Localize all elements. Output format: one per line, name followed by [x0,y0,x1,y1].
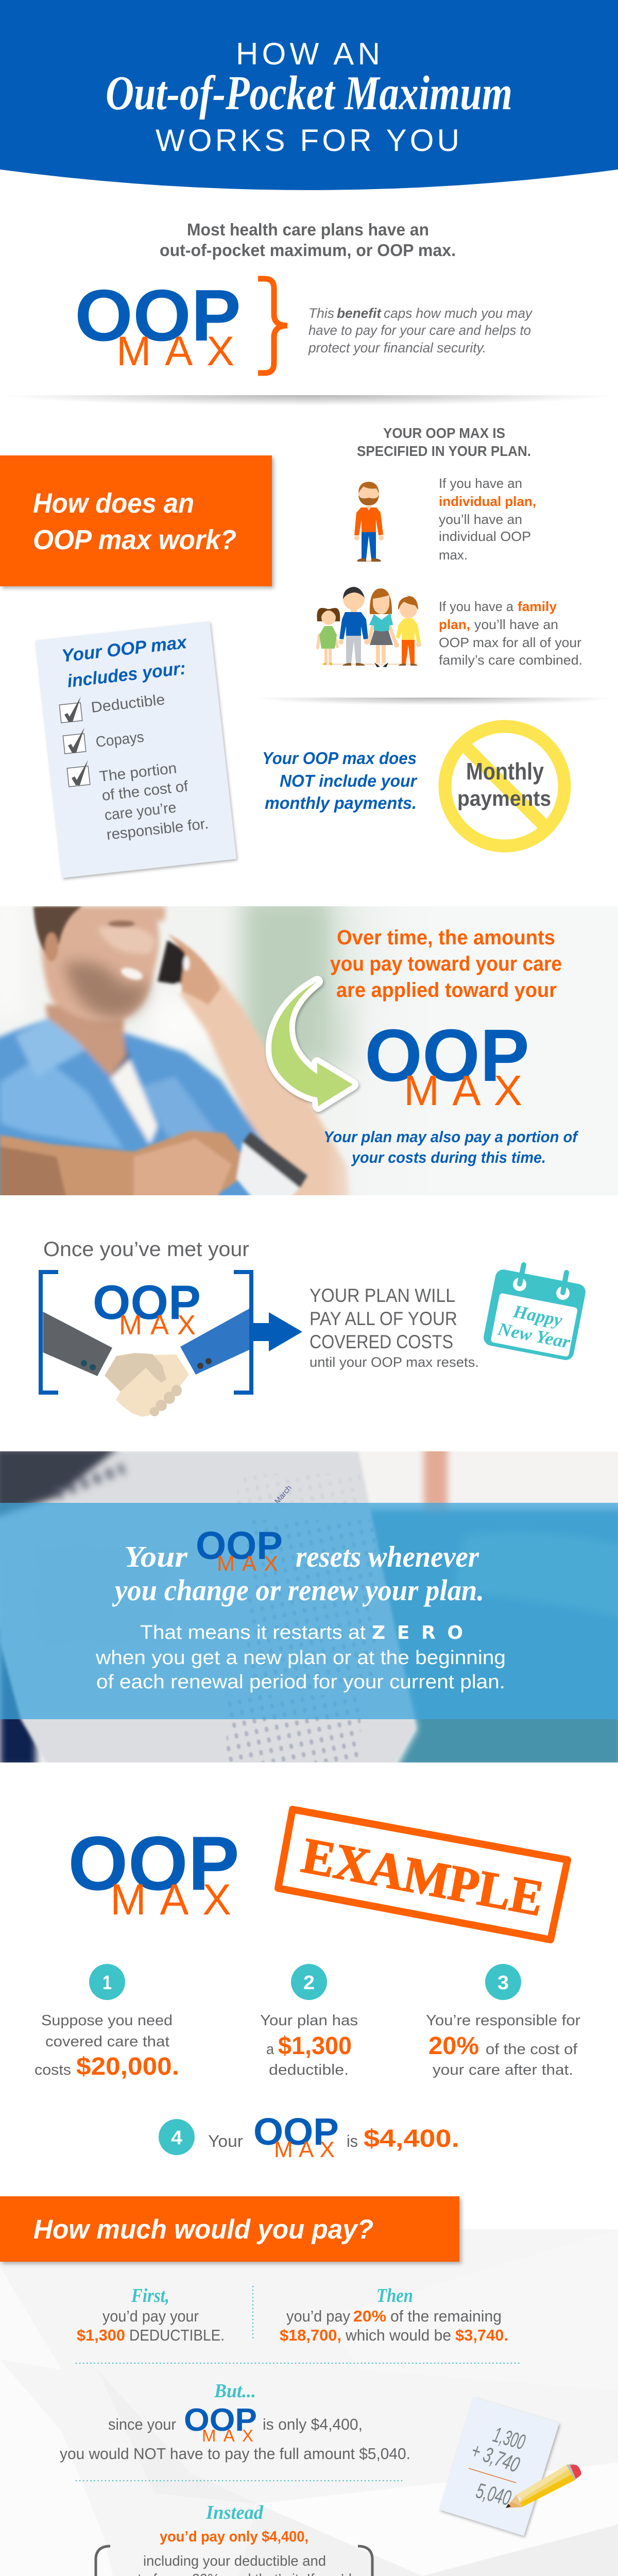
instead text: you’d pay only $4,400, [160,2529,308,2545]
example stamp [278,1809,568,1940]
step 1: Suppose you need [41,2012,173,2029]
family plan text: family’s care combined. [439,652,582,668]
plan pays portion text [323,1128,579,1166]
OOP max logo: OOP [253,2110,339,2153]
step 2: deductible. [269,2062,349,2078]
OOP max logo: MAX [116,328,234,375]
plan pays all text: until your OOP max resets. [310,1354,479,1370]
step 3: You’re responsible for [426,2012,580,2029]
step 3 [426,1964,580,2078]
step 2 [260,1964,358,2078]
then step text: you’d pay [286,2307,350,2325]
then step text: Then [376,2285,413,2307]
intro text: out-of-pocket maximum, or OOP max. [160,241,456,260]
checklist label: care you’re [104,800,177,824]
individual plan text [439,476,536,563]
checklist label [98,760,210,843]
intro text: Most health care plans have an [187,220,429,239]
divider shadow [252,698,618,713]
step 3: your care after that. [433,2062,573,2078]
first step text: you’d pay your [102,2307,199,2325]
then step text: $3,740. [455,2326,508,2344]
raised arm [178,970,351,1195]
left brace [84,2546,110,2576]
OOP max logo: OOP [365,1014,529,1097]
benefit description: protect your financial security. [308,340,486,355]
example stamp: EXAMPLE [298,1827,548,1927]
header banner [0,0,618,190]
stubble [64,962,149,1018]
family plan text [439,599,582,668]
reset text: That means it restarts at [140,1622,366,1643]
photo: man on phone [0,896,618,1200]
step 1: $20,000. [76,2053,179,2080]
reset text: ZERO [372,1622,463,1643]
boy [394,596,421,666]
panel: how does an OOP max work: OOP max work? [33,524,236,555]
icon: happy new year calendar [482,1265,587,1362]
head [41,906,165,1022]
first step text [77,2285,225,2344]
neck [45,1005,126,1077]
note with sum and pencil: + 3,740 [468,2438,523,2477]
icon: no monthly payments: payments [457,786,551,810]
divider shadow [0,395,618,416]
girl [317,608,340,666]
benefit description: caps how much you may [384,306,533,321]
icon: happy new year calendar: Happy [511,1301,564,1330]
note with sum and pencil: 5,040 [474,2478,514,2510]
icon: individual man [354,482,384,562]
step 4: 4 [171,2127,182,2149]
OOP max logo: OOP [93,1275,201,1329]
phone [158,940,185,985]
checklist label: responsible for. [106,816,210,843]
shirt [0,1018,281,1200]
photo heading text: you pay toward your care [330,953,562,975]
checklist label: The portion [98,760,178,785]
checkbox: deductible [59,697,82,723]
step 2: a [266,2041,274,2058]
father [338,587,369,666]
step 3: of the cost of [486,2041,578,2058]
step 4: Your [208,2132,243,2150]
checklist label: Copays [95,729,145,751]
reset text: when you get a new plan or at the beginning [95,1647,506,1669]
OOP max logo: OOP [184,2402,257,2438]
specified in your plan heading: YOUR OOP MAX IS [383,425,505,441]
OOP max logo: OOP [196,1524,283,1568]
orange brace [258,279,287,373]
front arm [0,1131,250,1200]
tee [110,1059,158,1144]
then step text [280,2285,508,2344]
icon: family [317,587,421,667]
then step text: of the remaining [390,2307,502,2325]
panel: includes note [36,621,236,878]
OOP max logo: MAX [274,2137,335,2162]
does not include text: NOT include your [280,771,418,790]
step 4: $4,400. [364,2125,459,2153]
OOP max logo: OOP [75,275,241,357]
plan pays all text [310,1285,479,1370]
does not include text: monthly payments. [265,793,417,812]
but text: is only $4,400, [263,2415,363,2433]
reset text: you change or renew your plan. [112,1573,484,1607]
title line 2 script: Out-of-Pocket Maximum [106,66,512,120]
step 2: 2 [303,1972,315,1994]
does not include text: Your OOP max does [262,749,417,768]
once you've met text: Once you’ve met your [43,1238,249,1261]
step 1: costs [35,2062,71,2078]
OOP max logo: OOP [68,1820,239,1906]
family plan text: plan, [439,617,470,632]
instead detail text: including your deductible and [143,2553,326,2569]
but text: But... [214,2380,256,2402]
icon: no monthly payments: Monthly [466,758,544,785]
specified in your plan heading [357,425,531,459]
teeth [119,965,144,982]
hand [167,934,220,1005]
panel: grey faceted background [0,2229,618,2576]
reset text: resets whenever [296,1540,479,1573]
benefit description [308,306,533,355]
note with sum and pencil [439,2397,581,2536]
then step text: which would be [345,2326,451,2344]
family plan text: OOP max for all of your [439,635,581,650]
plan pays all text: PAY ALL OF YOUR [310,1308,457,1329]
OOP max logo: MAX [202,2426,253,2445]
but text [60,2380,410,2463]
photo: calendar with blue band: March [273,1484,294,1506]
individual plan text: individual plan, [439,494,536,509]
note heading: Your OOP max [61,632,188,666]
individual plan text: individual OOP [439,529,531,544]
but text: since your [108,2415,176,2433]
reset text [95,1524,506,1693]
title line 1: HOW AN [236,37,380,71]
first step text: DEDUCTIBLE. [129,2326,225,2344]
note with sum and pencil: 1,300 [491,2422,528,2454]
family plan text: If you have a [439,599,514,614]
specified in your plan heading: SPECIFIED IN YOUR PLAN. [357,443,531,459]
arrow: green curved [271,981,353,1106]
icon: no monthly payments [445,726,564,846]
but text: you would NOT have to pay the full amount $5,040. [60,2445,410,2463]
benefit description: have to pay for your care and helps to [308,323,531,338]
first step text: $1,300 [77,2326,125,2344]
photo heading text: Over time, the amounts [337,926,555,949]
reset text: of each renewal period for your current plan. [96,1671,505,1693]
benefit description: benefit [337,306,382,321]
family plan text: family [518,599,557,614]
panel: how does an OOP max work [0,455,272,586]
then step text: $18,700, [280,2326,341,2344]
reset text: Your [124,1540,187,1573]
photo heading text [330,926,562,1002]
card [236,1132,307,1200]
intro text [160,220,456,260]
arrow: blue [253,1312,302,1351]
plan pays portion text: Your plan may also pay a portion of [323,1128,579,1146]
icon: happy new year calendar: New Year [495,1318,572,1352]
OOP max logo: MAX [404,1066,522,1114]
first step text: First, [131,2285,169,2307]
step 2: Your plan has [260,2012,358,2029]
individual plan text: max. [439,547,468,563]
checkbox: portion [67,760,90,787]
photo heading text: are applied toward your [336,979,557,1002]
plan pays portion text: your costs during this time. [351,1148,546,1166]
handshake in brackets [41,1272,251,1417]
plan pays all text: COVERED COSTS [310,1331,453,1352]
OOP max logo: MAX [217,1551,278,1575]
note heading [61,632,188,691]
instead detail text [109,2553,360,2576]
panel: how much would you pay [0,2196,459,2262]
then step text: 20% [353,2307,386,2325]
checklist label: Deductible [90,691,166,716]
checklist label: of the cost of [101,778,190,804]
step 1: covered care that [45,2033,169,2050]
step 3: 3 [497,1972,509,1994]
note heading: includes your: [66,658,186,691]
photo: calendar with blue band [0,1443,618,1767]
title line 3: WORKS FOR YOU [156,123,459,158]
instead text [160,2502,308,2545]
step 1: 1 [102,1972,112,1994]
instead text: Instead [205,2502,264,2523]
right brace [358,2546,384,2576]
step 4 [159,2110,459,2162]
OOP max logo: MAX [110,1875,231,1924]
step 1 [35,1964,179,2080]
step 3: 20% [428,2032,479,2060]
icon: pencil [506,2464,581,2508]
family plan text: you’ll have an [474,617,558,632]
panel: how much would you pay: How much would you pay? [33,2214,373,2245]
panel: how does an OOP max work: How does an [33,488,194,519]
step 2: $1,300 [278,2032,352,2060]
does not include text [262,749,418,812]
individual plan text: you’ll have an [439,512,522,527]
individual plan text: If you have an [439,476,522,491]
benefit description: This [308,306,334,321]
hair [31,906,83,952]
mother [369,588,396,667]
checkbox: copays [63,727,86,754]
OOP max logo: MAX [119,1310,196,1341]
plan pays all text: YOUR PLAN WILL [310,1285,455,1306]
step 4: is [347,2132,358,2150]
